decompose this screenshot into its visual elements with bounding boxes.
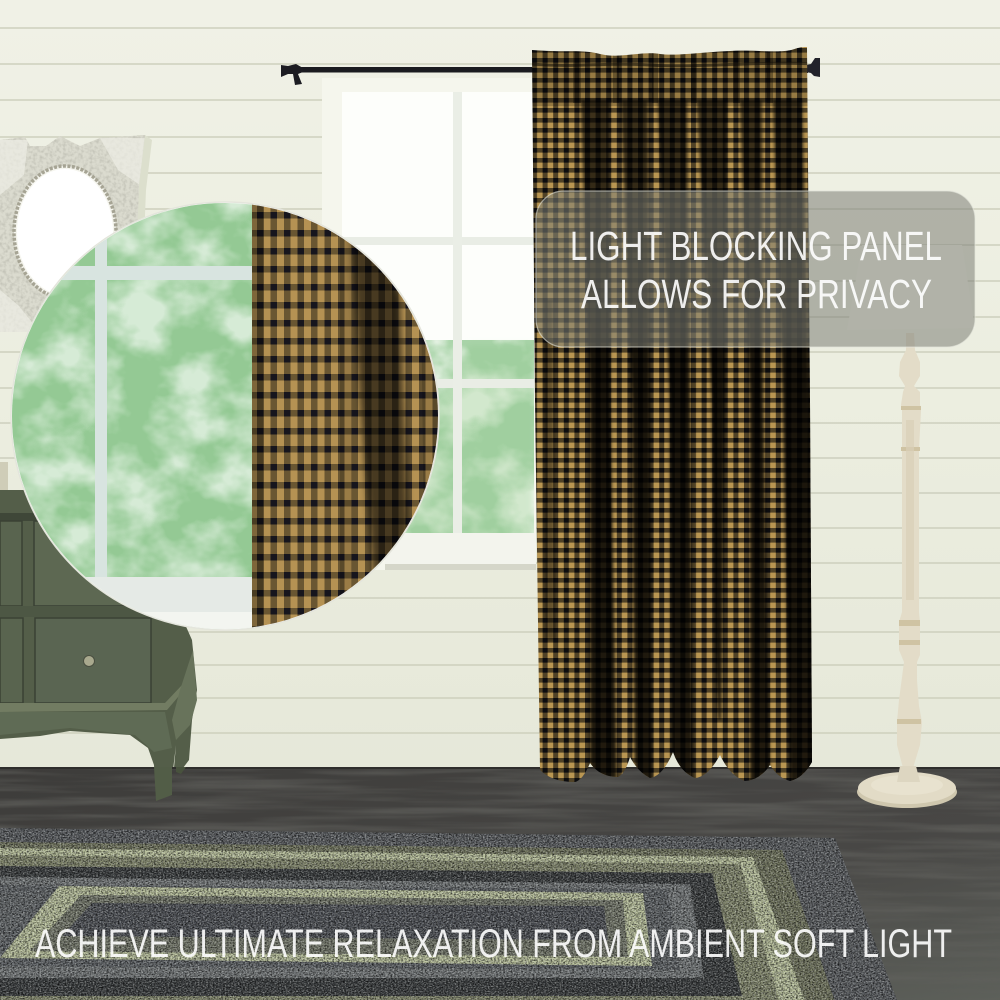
rod pocket gather xyxy=(530,63,815,66)
fold shading xyxy=(581,100,815,790)
wood floor xyxy=(0,767,1000,1000)
text panel xyxy=(536,191,975,347)
braided rug xyxy=(0,820,915,1000)
zoom lens xyxy=(0,200,445,642)
decorative mirror xyxy=(0,130,152,335)
wall with horizontal planks xyxy=(0,0,1000,770)
magnified fabric xyxy=(252,200,445,640)
floor lamp xyxy=(847,245,975,768)
drawer knob xyxy=(84,656,94,666)
inner dark field xyxy=(30,895,628,957)
curtain rod xyxy=(281,58,820,85)
curtain xyxy=(525,40,820,790)
inner light band xyxy=(0,886,652,966)
lamp base on floor xyxy=(857,766,957,808)
window xyxy=(322,78,536,570)
dresser xyxy=(0,462,197,801)
dresser legs on floor xyxy=(154,767,186,801)
